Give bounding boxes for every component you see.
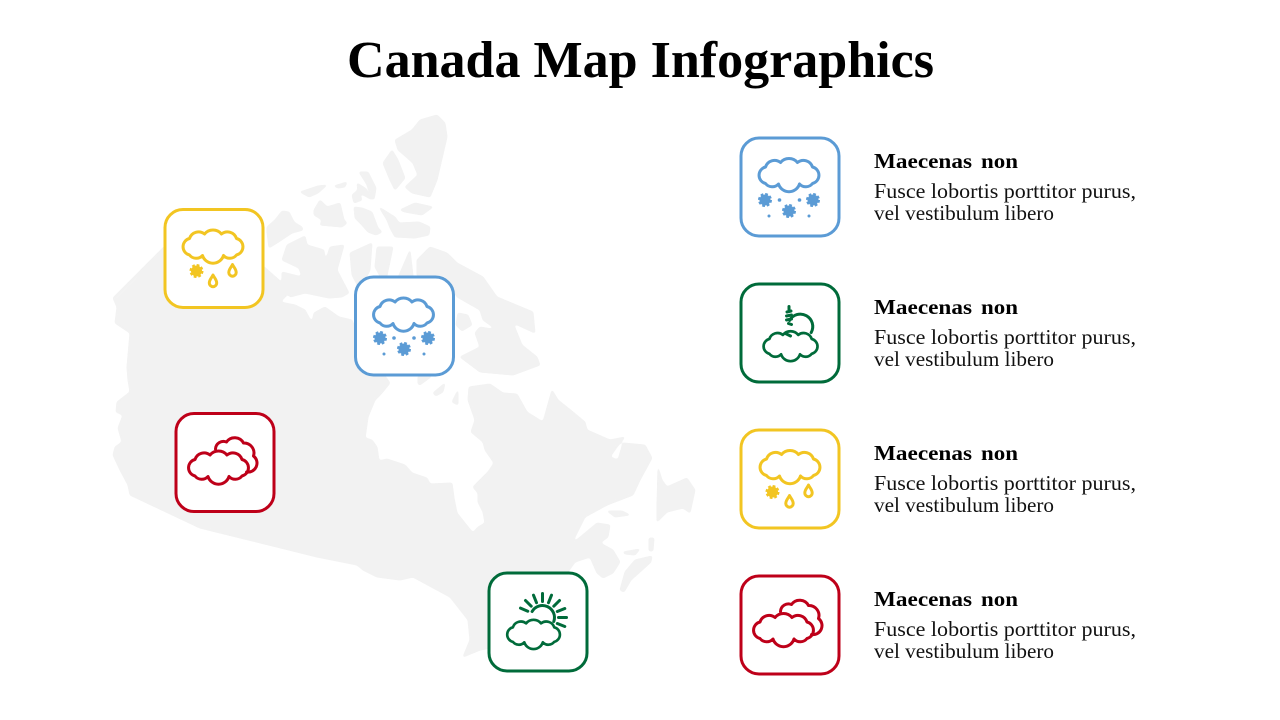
list item 3 [741,430,1136,528]
heading [874,441,1018,465]
heading: Maecenas [874,587,972,611]
heading: non [981,587,1018,611]
map marker: red clouds icon [176,414,274,512]
map marker: yellow sleet icon [165,210,263,308]
text block: Fusce lobortis porttitor purus, [874,617,1136,641]
text block: Fusce lobortis porttitor purus, [874,179,1136,203]
heading: Maecenas [874,295,972,319]
icon: yellow sleet cloud [741,430,839,528]
map marker: green sun and cloud icon [489,573,587,671]
map of Canada [113,115,695,657]
title: Canada Map Infographics [347,32,934,89]
icon: blue snow cloud [741,138,839,236]
list item 2 [741,284,1136,382]
text block: vel vestibulum libero [874,639,1054,663]
text block [874,617,1136,663]
heading [874,587,1018,611]
text block: Fusce lobortis porttitor purus, [874,325,1136,349]
text block [874,471,1136,517]
icon: red clouds [741,576,839,674]
heading: Maecenas [874,149,972,173]
text block: vel vestibulum libero [874,493,1054,517]
text block [874,325,1136,371]
heading [874,295,1018,319]
map marker: blue snow icon [356,277,454,375]
heading: non [981,441,1018,465]
text block [874,179,1136,225]
list item 4 [741,576,1136,674]
heading: Maecenas [874,441,972,465]
icon: green cloud with sun [741,284,839,382]
heading: non [981,295,1018,319]
heading [874,149,1018,173]
heading: non [981,149,1018,173]
text block: vel vestibulum libero [874,201,1054,225]
text block: vel vestibulum libero [874,347,1054,371]
list item 1 [741,138,1136,236]
text block: Fusce lobortis porttitor purus, [874,471,1136,495]
